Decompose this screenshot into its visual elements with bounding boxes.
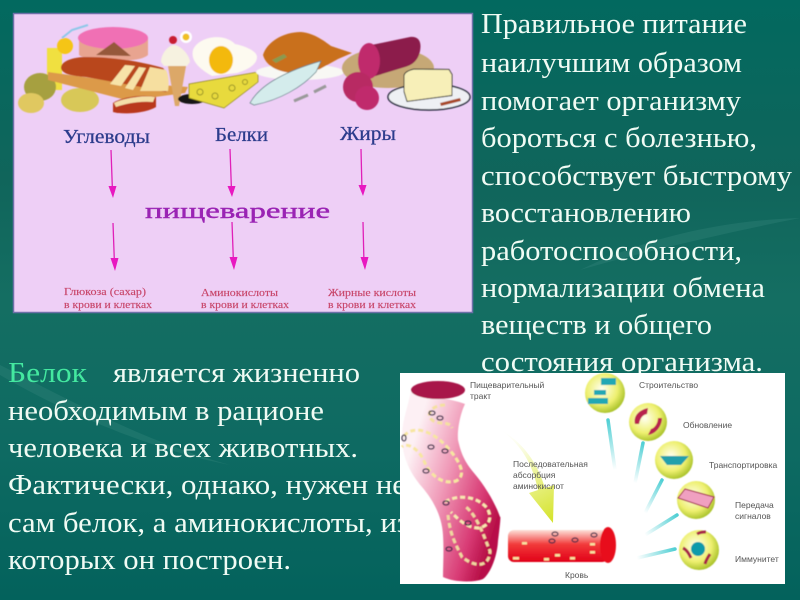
panel: amino acid absorption: [400, 373, 785, 584]
text block: nutrition: нормализации обмена: [481, 273, 766, 304]
function labels: Иммунитет: [735, 554, 779, 564]
background swoosh: [0, 218, 800, 465]
label: fatty acids: Жирные кислоты: [328, 288, 416, 299]
blood label: Кровь: [565, 570, 589, 580]
text block: protein: которых он построен.: [8, 545, 291, 576]
label: proteins: Белки: [215, 124, 268, 146]
text block: nutrition: наилучшим образом: [481, 48, 742, 79]
function labels: Строительство: [639, 380, 698, 390]
label: digestive tract: тракт: [470, 391, 491, 401]
function labels: Обновление: [683, 420, 732, 430]
cyan arrows: [608, 420, 677, 558]
text block: protein: сам белок, а аминокислоты, из: [8, 508, 409, 539]
text block: nutrition: работоспособности,: [481, 236, 742, 267]
text block: protein: Фактически, однако, нужен не: [8, 470, 406, 501]
label: fatty acids: [328, 288, 417, 311]
text block: protein: человека и всех животных.: [8, 433, 358, 464]
text block: nutrition: восстановлению: [481, 198, 691, 229]
text block: nutrition: Правильное питание: [481, 9, 747, 40]
label: fats: Жиры: [340, 123, 396, 145]
label: amino acids: [201, 288, 290, 311]
label: glucose: в крови и клетках: [64, 300, 153, 311]
label: digestive tract: [470, 380, 545, 401]
arrows to digestion: [108, 149, 366, 198]
icon: food group fats: [342, 37, 470, 110]
blood vessel: [508, 527, 616, 563]
text block: nutrition: помогает организму: [481, 86, 741, 117]
function icons: [585, 373, 719, 570]
function labels: [639, 380, 779, 564]
text block: protein: является жизненно: [113, 358, 360, 389]
absorption arrow: [498, 428, 554, 523]
absorption label: аминокислот: [513, 481, 564, 491]
text block: protein: [8, 358, 409, 576]
label: glucose: Глюкоза (сахар): [64, 287, 147, 298]
absorption label: [513, 459, 588, 491]
digestive tract: [402, 381, 500, 581]
function labels: Транспортировка: [709, 460, 778, 470]
text block: nutrition: веществ и общего: [481, 310, 712, 341]
arrows to products: [110, 222, 368, 271]
label: amino acids: в крови и клетках: [201, 300, 290, 311]
function labels: Передача: [735, 500, 774, 510]
label: digestive tract: Пищеварительный: [470, 380, 545, 390]
text block: nutrition: [481, 9, 792, 378]
icon: food group carbohydrates: [18, 25, 188, 113]
text block: nutrition: бороться с болезнью,: [481, 123, 757, 154]
label: carbohydrates: Углеводы: [63, 126, 150, 148]
text block: protein: необходимым в рационе: [8, 396, 324, 427]
function labels: сигналов: [735, 511, 771, 521]
label: digestion: пищеварение: [145, 198, 330, 223]
text block: protein: Белок: [8, 358, 87, 389]
panel: digestion diagram: [14, 14, 472, 312]
absorption label: абсорбция: [513, 470, 556, 480]
text block: nutrition: способствует быстрому: [481, 161, 792, 192]
text block: nutrition: состояния организма.: [481, 347, 763, 378]
absorption label: Последовательная: [513, 459, 588, 469]
icon: food group proteins: [161, 31, 352, 108]
label: amino acids: Аминокислоты: [201, 288, 278, 299]
label: fatty acids: в крови и клетках: [328, 300, 417, 311]
label: glucose: [64, 287, 153, 311]
